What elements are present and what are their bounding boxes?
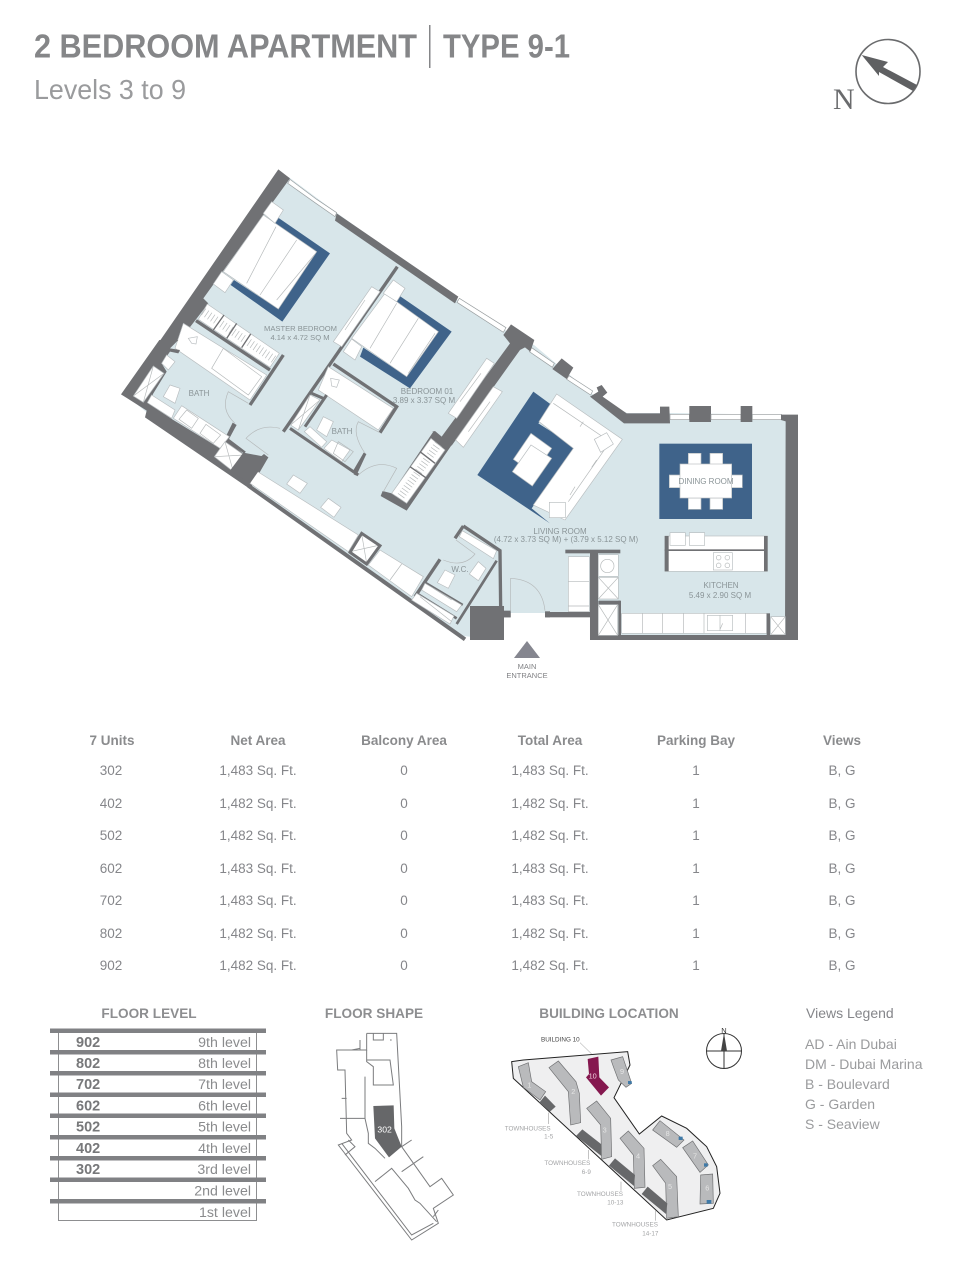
windows [457, 298, 593, 395]
row 802: 802 [100, 926, 122, 941]
leader lines [548, 1043, 656, 1221]
row 802: 0 [400, 926, 408, 941]
bedroom window [288, 179, 337, 217]
row 302: 1 [692, 763, 700, 778]
floor level chart: 6th level [198, 1098, 251, 1114]
row 802: 1 [692, 926, 700, 941]
floor level chart: 702 [76, 1077, 100, 1093]
bedroom wardrobe [333, 287, 380, 347]
corridor door [246, 427, 280, 455]
WC walls [415, 526, 501, 608]
row 402 [100, 796, 856, 811]
row 602: 1,483 Sq. Ft. [219, 861, 297, 876]
views legend: DM - Dubai Marina [805, 1056, 923, 1072]
site labels: BUILDING 10 [541, 1036, 580, 1043]
row 402: 0 [400, 796, 408, 811]
icon: north compass: N [833, 83, 855, 116]
building numbers: 9 [620, 1067, 624, 1076]
room labels: 5.49 x 2.90 SQ M [689, 591, 751, 600]
row 602: 1,483 Sq. Ft. [511, 861, 589, 876]
row 702 [100, 893, 856, 908]
table header [89, 733, 861, 748]
wardrobe [381, 432, 452, 511]
row 702: 0 [400, 893, 408, 908]
floor area [124, 171, 798, 640]
master bath tub and vanity [175, 323, 267, 400]
floor level chart: 902 [76, 1035, 100, 1051]
floor level chart [50, 1028, 266, 1221]
living, dining and kitchen [477, 385, 798, 640]
row 402: 1,482 Sq. Ft. [511, 796, 589, 811]
site labels [505, 1036, 659, 1237]
bedroom 01 bed and rug [360, 295, 452, 388]
table header: Net Area [230, 733, 286, 748]
cistern unit [147, 395, 175, 418]
top wall [335, 213, 458, 303]
room labels: 4.14 x 4.72 SQ M [270, 333, 330, 342]
room labels: KITCHEN [703, 581, 739, 590]
floor level chart: 5th level [198, 1120, 251, 1136]
row 502: 0 [400, 828, 408, 843]
upper left wall [159, 169, 290, 342]
row 302: 1,483 Sq. Ft. [511, 763, 589, 778]
row 502: 502 [100, 828, 122, 843]
kitchen counter [622, 613, 785, 636]
views legend: AD - Ain Dubai [805, 1036, 897, 1052]
floor level chart: 502 [76, 1120, 100, 1136]
icon: map compass [706, 1026, 742, 1069]
site labels: TOWNHOUSES [505, 1125, 551, 1132]
kitchen island [665, 533, 768, 571]
room labels: DINING ROOM [678, 477, 734, 486]
row 902 [100, 958, 856, 973]
outer diagonal wall [248, 486, 465, 639]
room labels: LIVING ROOM [533, 527, 587, 536]
heading: building location: BUILDING LOCATION [539, 1006, 679, 1021]
console counter [250, 470, 358, 552]
townhouses [539, 1096, 667, 1214]
row 802: B, G [828, 926, 856, 941]
room labels: BATH [332, 427, 353, 436]
bedroom door jamb [227, 425, 245, 453]
dividing wall, windows and TV units [432, 298, 593, 447]
row 502: B, G [828, 828, 856, 843]
corridor door [358, 465, 397, 492]
row 702: 1,483 Sq. Ft. [511, 893, 589, 908]
unit table [89, 733, 861, 973]
entrance door [511, 578, 545, 611]
row 302: 1,483 Sq. Ft. [219, 763, 297, 778]
row 702: B, G [828, 893, 856, 908]
floor level chart: 1st level [199, 1205, 251, 1221]
row 902: 1,482 Sq. Ft. [219, 958, 297, 973]
row 402: B, G [828, 796, 856, 811]
building numbers: 2 [571, 1087, 575, 1096]
bedroom 01 bath [318, 367, 393, 430]
room labels: W.C. [451, 565, 469, 574]
living TV unit [456, 387, 502, 447]
title divider [429, 25, 430, 68]
master bed and rug [231, 217, 330, 322]
floor level chart: 602 [76, 1098, 100, 1114]
site labels: 10-13 [607, 1199, 624, 1206]
row 402: 402 [100, 796, 122, 811]
floor level chart: 8th level [198, 1056, 251, 1072]
building numbers: 3 [603, 1126, 607, 1135]
building numbers: 8 [666, 1129, 670, 1138]
bath walls [121, 340, 268, 489]
building numbers: 7 [693, 1151, 697, 1160]
site labels: 6-9 [582, 1169, 591, 1176]
bedroom TV unit [448, 358, 494, 418]
row 302: 302 [100, 763, 122, 778]
master wardrobe [198, 304, 279, 367]
dining table and chairs [669, 453, 742, 509]
views legend: G - Garden [805, 1096, 875, 1112]
building 10 highlighted [586, 1057, 609, 1096]
row 402: 1 [692, 796, 700, 811]
site labels: 1-5 [544, 1134, 554, 1141]
heading: floor level: FLOOR LEVEL [101, 1006, 197, 1021]
tall units [503, 550, 621, 640]
toilet [163, 385, 180, 403]
row 302: B, G [828, 763, 856, 778]
block [230, 453, 268, 483]
coffee tables [513, 433, 552, 474]
floor level chart: 302 [76, 1162, 100, 1178]
building numbers: 5 [668, 1182, 672, 1191]
row 702: 1,483 Sq. Ft. [219, 893, 297, 908]
room labels: MAIN [518, 662, 536, 671]
views legend [805, 1005, 923, 1132]
row 802 [100, 926, 856, 941]
room labels: 3.89 x 3.37 SQ M [393, 396, 455, 405]
floor shape plan: 302 [377, 1125, 392, 1135]
table header: Balcony Area [361, 733, 447, 748]
row 502 [100, 828, 856, 843]
heading: floor shape: FLOOR SHAPE [325, 1006, 423, 1021]
room labels: MASTER BEDROOM [264, 324, 337, 333]
row 702: 1 [692, 893, 700, 908]
floor level chart: 4th level [198, 1141, 251, 1157]
icon: north compass [833, 40, 920, 116]
master bedroom and bedroom 01 [159, 169, 458, 475]
views legend: B - Boulevard [805, 1076, 890, 1092]
room labels [189, 324, 751, 680]
building numbers [527, 1067, 709, 1193]
icon: map compass: N [721, 1026, 727, 1035]
site labels: TOWNHOUSES [544, 1160, 590, 1167]
building numbers: 10 [589, 1072, 597, 1081]
building numbers: 1 [527, 1080, 531, 1089]
master bath [121, 340, 280, 489]
table header: Total Area [518, 733, 583, 748]
site labels: TOWNHOUSES [577, 1191, 623, 1198]
row 902: 902 [100, 958, 122, 973]
row 602: 0 [400, 861, 408, 876]
lower shaft [214, 442, 244, 472]
type label: TYPE 9-1 [443, 28, 570, 64]
floor level chart: 3rd level [197, 1162, 251, 1178]
views legend: Views Legend [806, 1005, 894, 1021]
room labels: (4.72 x 3.73 SQ M) + (3.79 x 5.12 SQ M) [494, 535, 638, 544]
row 902: 1 [692, 958, 700, 973]
basins [179, 410, 221, 443]
floor level chart: 802 [76, 1056, 100, 1072]
floor level chart: 2nd level [194, 1184, 251, 1200]
bath door [225, 392, 248, 423]
dividing wall [432, 324, 534, 446]
window pier [552, 358, 573, 379]
row 902: 1,482 Sq. Ft. [511, 958, 589, 973]
table header: Views [823, 733, 861, 748]
row 602: B, G [828, 861, 856, 876]
room labels: BATH [189, 389, 210, 398]
row 902: B, G [828, 958, 856, 973]
floor shape plan [337, 1033, 453, 1240]
subtitle: Levels 3 to 9 [34, 74, 186, 105]
title: 2 BEDROOM APARTMENT [34, 28, 417, 64]
entrance column [470, 606, 504, 640]
room labels: BEDROOM 01 [401, 387, 454, 396]
linen niche [162, 355, 175, 370]
dining rug [659, 444, 752, 519]
living rug [477, 392, 575, 523]
site labels: 14-17 [642, 1230, 659, 1237]
row 702: 702 [100, 893, 122, 908]
table header: 7 Units [89, 733, 135, 748]
shaft [133, 366, 164, 402]
exterior walls and windows [590, 385, 670, 423]
sea view markers [628, 1081, 711, 1204]
row 802: 1,482 Sq. Ft. [511, 926, 589, 941]
room labels: ENTRANCE [506, 671, 548, 680]
entrance arrow [514, 641, 540, 658]
row 302 [100, 763, 856, 778]
row 602 [100, 861, 856, 876]
building numbers: 4 [636, 1151, 640, 1160]
bedroom divider [283, 267, 397, 432]
row 602: 602 [100, 861, 122, 876]
table header: Parking Bay [657, 733, 736, 748]
row 602: 1 [692, 861, 700, 876]
views legend: S - Seaview [805, 1116, 881, 1132]
floor plan [121, 169, 798, 680]
row 502: 1 [692, 828, 700, 843]
vanity [173, 406, 229, 448]
building location map [505, 1036, 720, 1237]
floor level chart: 7th level [198, 1077, 251, 1093]
floor level chart: 402 [76, 1141, 100, 1157]
row 502: 1,482 Sq. Ft. [219, 828, 297, 843]
floor level chart: 9th level [198, 1035, 251, 1051]
residential buildings [518, 1057, 713, 1218]
site outline [512, 1052, 720, 1220]
sofa [533, 394, 622, 520]
row 302: 0 [400, 763, 408, 778]
building numbers: 6 [705, 1184, 709, 1193]
site labels: TOWNHOUSES [612, 1222, 658, 1229]
row 902: 0 [400, 958, 408, 973]
row 402: 1,482 Sq. Ft. [219, 796, 297, 811]
row 502: 1,482 Sq. Ft. [511, 828, 589, 843]
row 802: 1,482 Sq. Ft. [219, 926, 297, 941]
corridor, kitchenette and WC [230, 432, 550, 640]
